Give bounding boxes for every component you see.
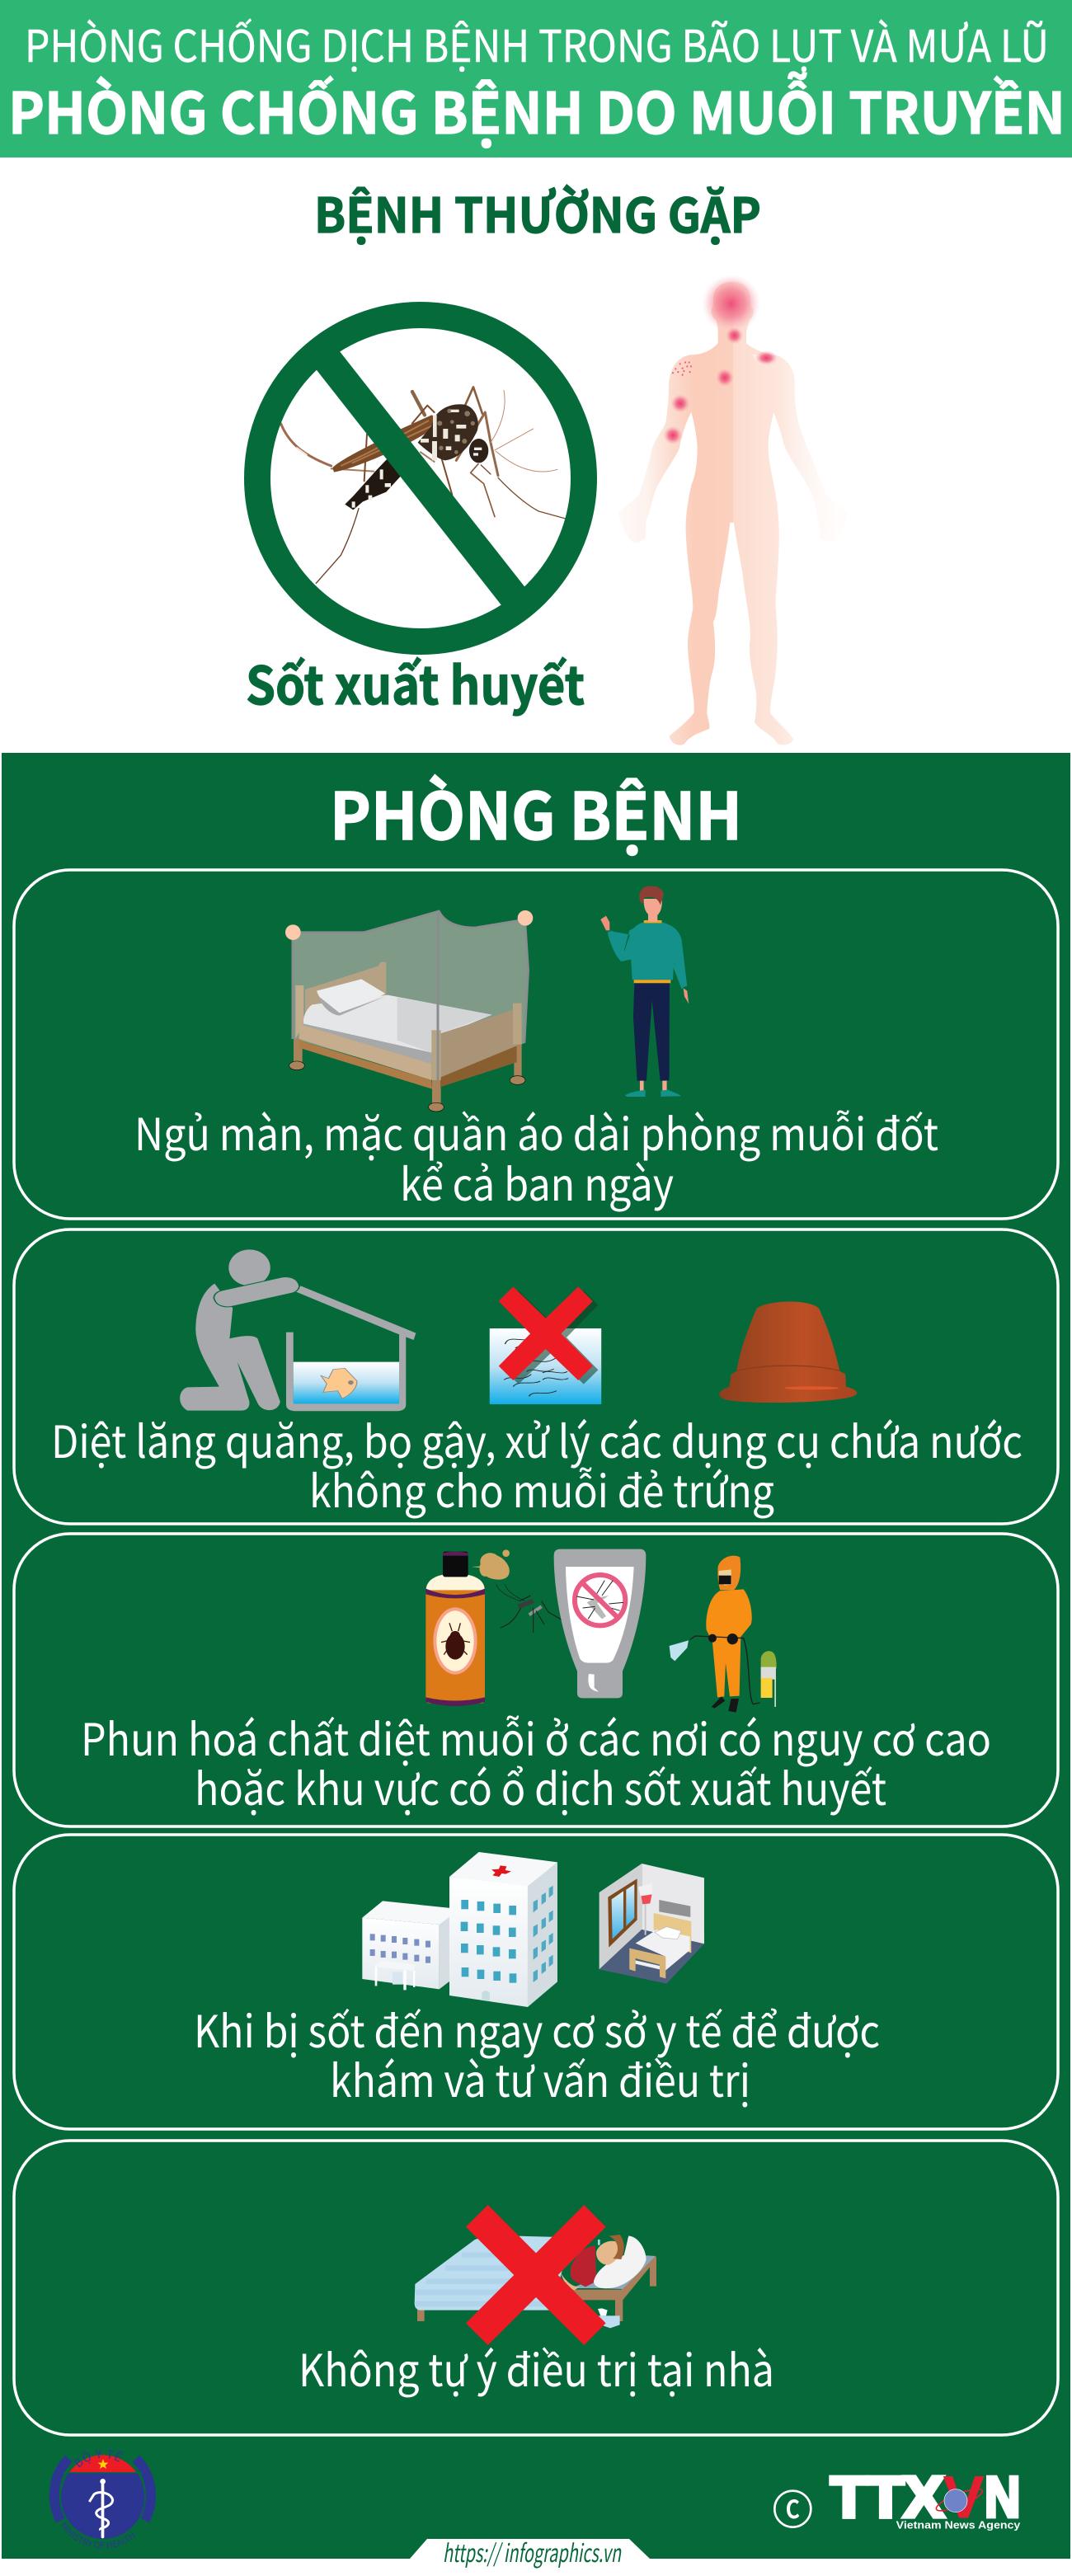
illustration: human body with symptoms [618,274,848,745]
copyright symbol: C [786,2489,800,2526]
icon: repellent tube [554,1549,646,1698]
logo: TTXVN Vietnam News Agency [774,2463,1021,2531]
logo: TTXVN Vietnam News Agency: V [943,2463,985,2531]
icon: mosquito prohibited [257,315,584,642]
icon: larvae in water crossed out [490,1286,601,1404]
caption card 4: Khi bị sốt đến ngay cơ sở y tế để được [194,1995,880,2061]
card 4: go to medical facility [14,1835,1058,2129]
logo: TTXVN Vietnam News Agency: TTX [830,2465,944,2529]
card 2: larvae and water containers [14,1229,1058,1524]
caption card 3: hoặc khu vực có ổ dịch sốt xuất huyết [195,1753,886,1818]
copyright symbol [774,2489,811,2527]
card 3: spraying chemicals [14,1534,1058,1826]
caption card 1 [134,1098,938,1214]
icon: person in long clothes [600,886,689,1097]
logo: TTXVN Vietnam News Agency: N [985,2465,1020,2529]
card 5: no self-treatment at home [14,2141,1058,2435]
caption card 5: Không tự ý điều trị tại nhà [299,2334,774,2400]
caption card 1: Ngủ màn, mặc quần áo dài phòng muỗi đốt [134,1098,938,1163]
icon: sprayer in protective suit [670,1556,777,1713]
section heading: common disease: BỆNH THƯỜNG GẶP [314,177,761,247]
caption card 2 [51,1406,1023,1521]
caption card 1: kể cả ban ngày [400,1149,674,1214]
card 1: bed net and long clothes [14,870,1058,1219]
icon: sick person in bed crossed out [415,2205,656,2345]
logo: Ministry of Health: MINISTRY OF HEALTH [61,2522,135,2549]
caption card 4: khám và tư vấn điều trị [330,2045,750,2110]
icon: bed with mosquito net [285,910,533,1112]
section heading: prevention: PHÒNG BỆNH [330,766,742,858]
icon: insect spray can [426,1549,510,1706]
icon: small mosquito [496,1585,563,1633]
logo: TTXVN Vietnam News Agency: Vietnam News Agency [896,2519,1021,2531]
caption card 3: Phun hoá chất diệt muỗi ở các nơi có nguy cơ cao [81,1704,991,1769]
logo: Ministry of Health: BỘ Y TẾ [74,2449,124,2467]
footer url tab: https:// infographics.vn [443,2533,622,2569]
footer url tab [410,2533,650,2576]
icon: person checking water tank [180,1249,416,1411]
icon: terracotta pot [719,1302,857,1403]
icon: hospital room [599,1864,704,1984]
icon: hospital buildings [362,1852,557,2007]
header banner [0,0,1072,157]
caption card 2: không cho muỗi đẻ trứng [309,1455,774,1521]
caption card 3 [81,1704,991,1818]
caption card 4 [194,1995,880,2110]
logo: Ministry of Health [49,2449,157,2549]
disease name: Sốt xuất huyết [246,645,585,720]
